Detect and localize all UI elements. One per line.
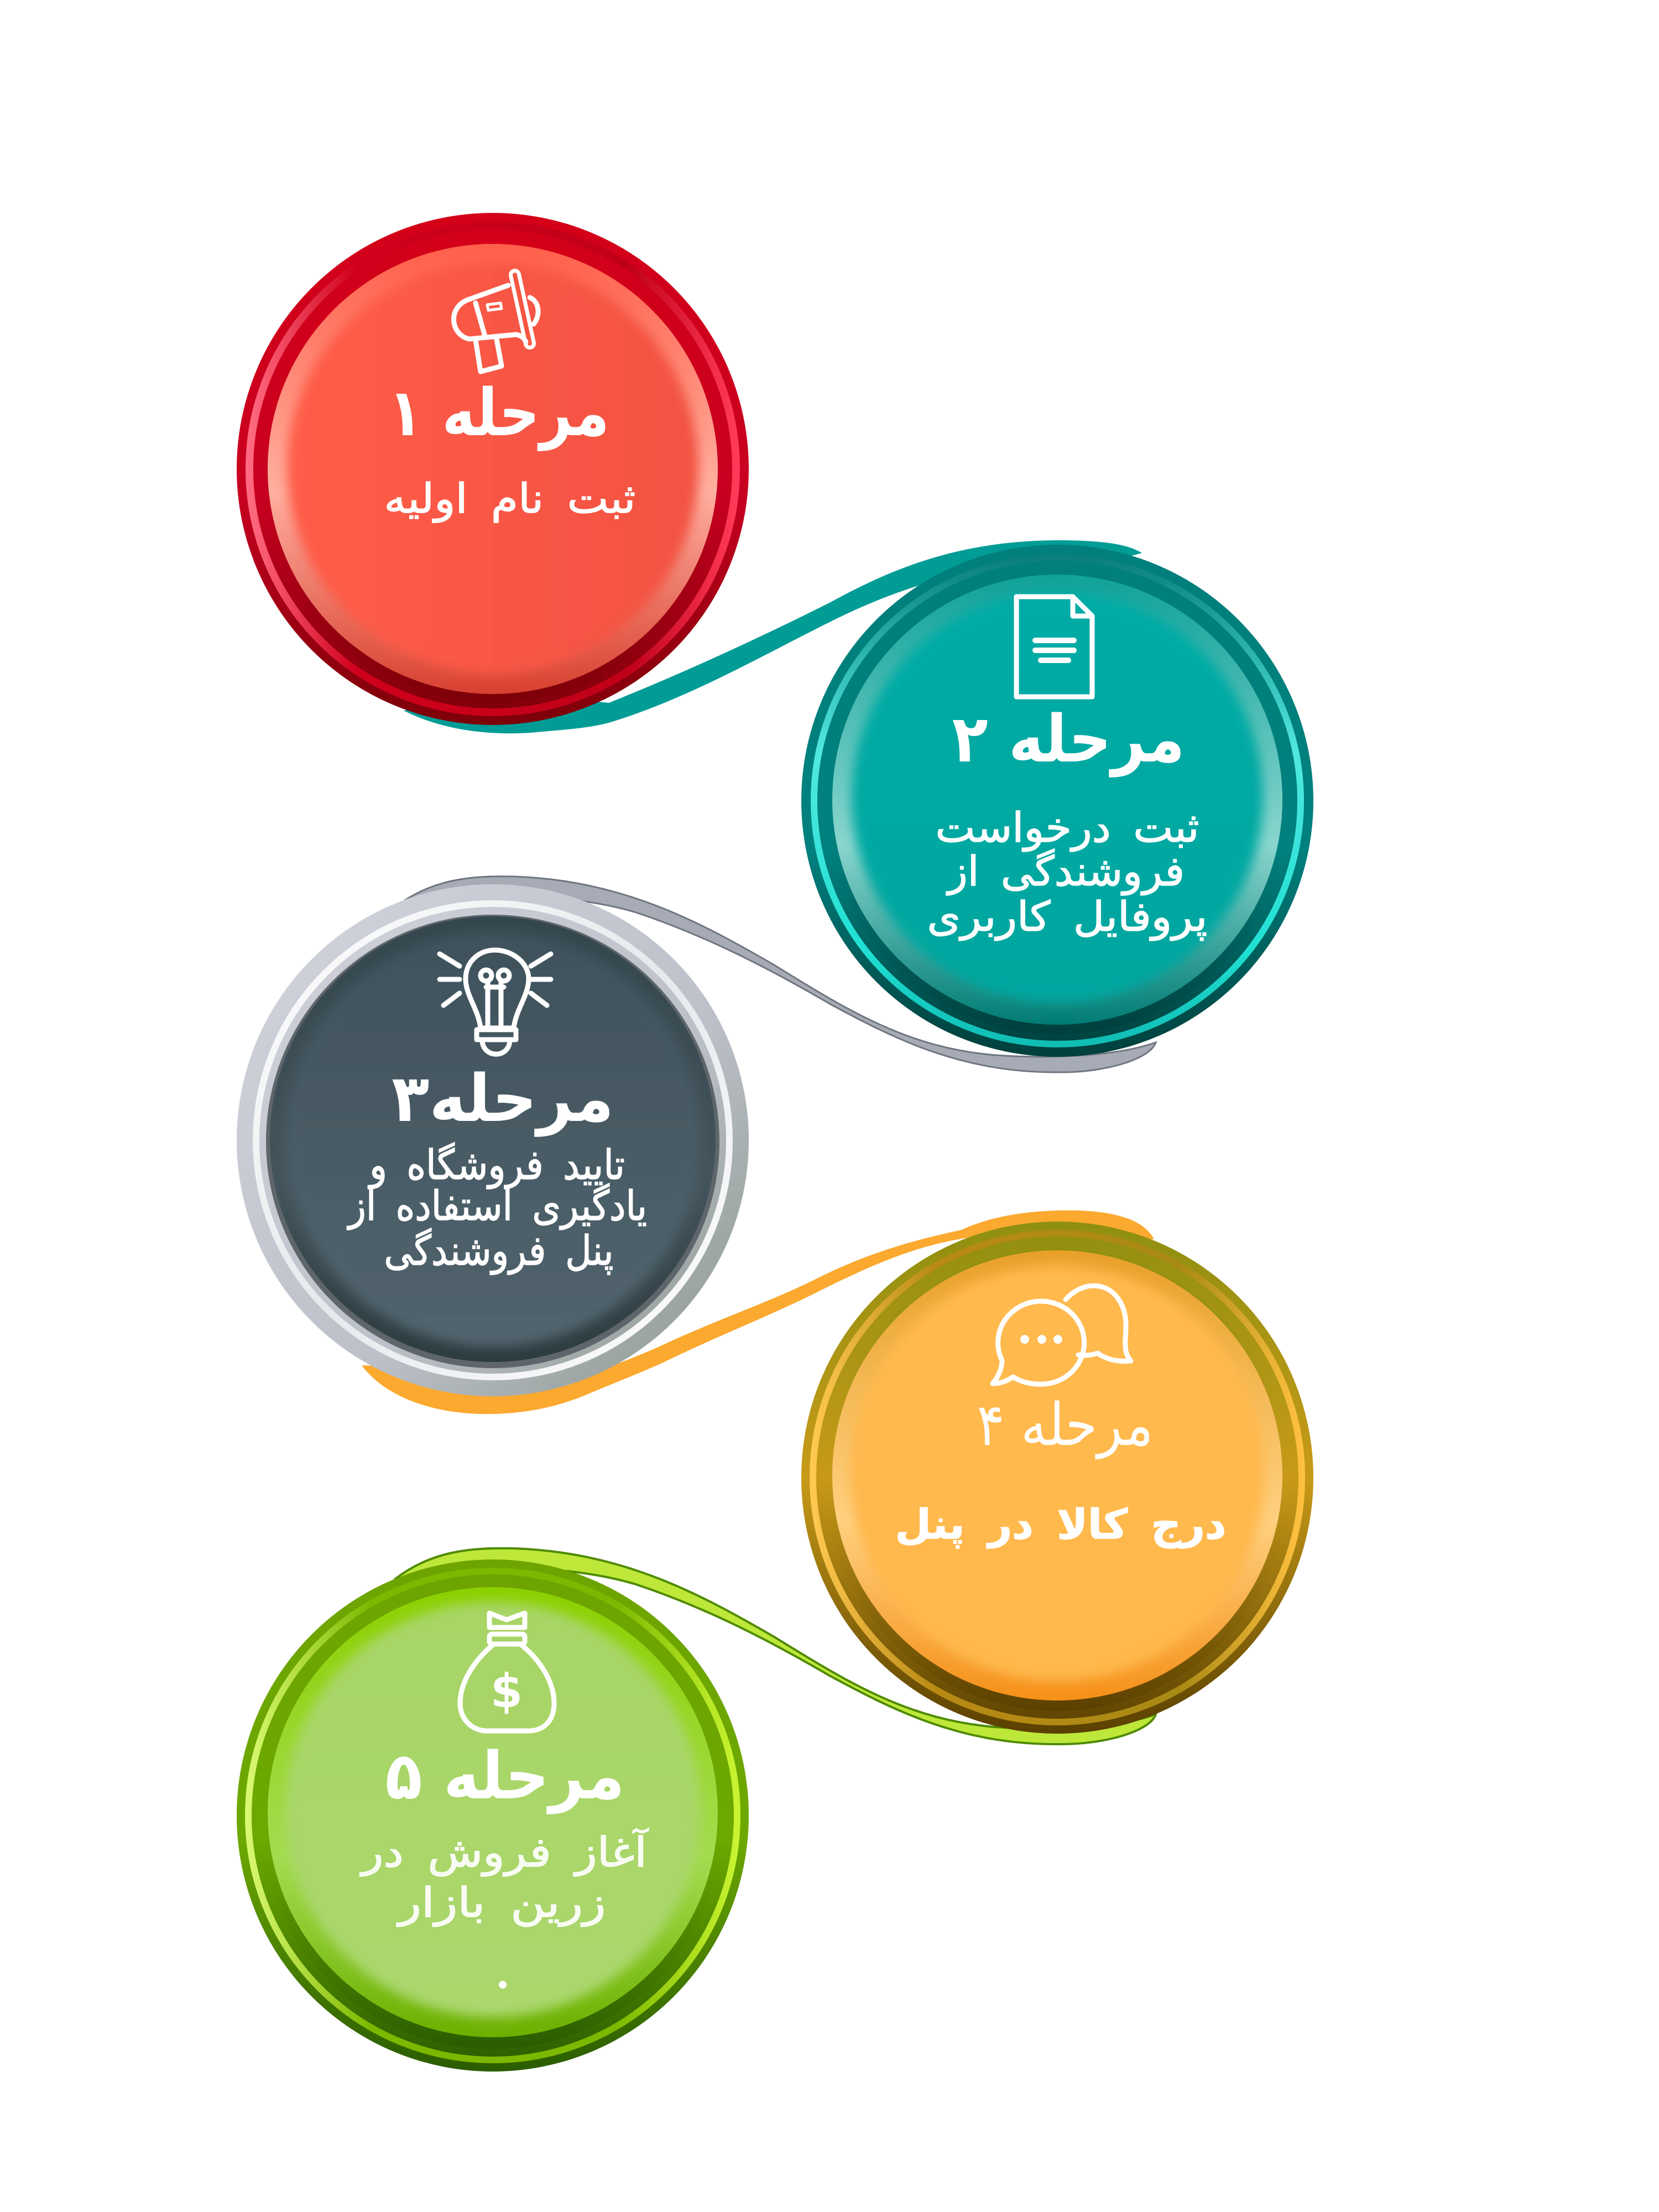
icon: document	[1016, 597, 1092, 697]
panel: step 3	[237, 884, 749, 1396]
icon: lightbulb	[440, 950, 551, 1054]
text: step 2: فروشندگی از	[946, 848, 1185, 895]
ribbon: step 1 to step 2	[404, 540, 1142, 733]
ribbon: step 4 to step 5	[395, 1548, 1156, 1744]
text: step 3: پنل فروشندگی	[384, 1227, 614, 1275]
icon: money bag	[460, 1613, 554, 1731]
text: step 2	[927, 804, 1208, 941]
text: step 4: درج کالا در پنل	[895, 1501, 1227, 1548]
heading: step 1: مرحله ۱	[388, 374, 609, 451]
panel: step 1	[237, 213, 749, 725]
icon dots	[1020, 1335, 1062, 1344]
text: step 3	[346, 1141, 647, 1275]
text: step 5	[359, 1828, 649, 1927]
heading: step 5: مرحله ۵	[385, 1738, 625, 1814]
text: step 3: تایید فروشگاه و	[367, 1141, 625, 1189]
text: step 2: پروفایل کاربری	[927, 893, 1208, 941]
icon: money bag: $	[491, 1664, 523, 1718]
disc rim 2	[801, 545, 1313, 1057]
disc rim 1	[237, 213, 749, 725]
disc rim 3	[237, 884, 749, 1396]
heading: step 2: مرحله ۲	[952, 701, 1185, 778]
disc rim 5	[237, 1559, 749, 2072]
heading: step 3: مرحله۳	[392, 1060, 614, 1137]
panel: step 5	[237, 1559, 749, 2072]
text: step 1: ثبت نام اولیه	[384, 475, 636, 523]
text dot	[499, 1981, 507, 1989]
icon: chat bubbles	[993, 1286, 1131, 1384]
icon: megaphone	[453, 275, 538, 372]
text: step 3: یادگیری استفاده از	[346, 1182, 647, 1230]
text: step 5: زرین بازار	[396, 1879, 606, 1927]
ribbon: step 2 to step 3	[395, 877, 1156, 1072]
panel: step 4	[801, 1222, 1313, 1734]
text: step 5: آغاز فروش در	[359, 1828, 649, 1876]
heading: step 4: مرحله ۴	[977, 1391, 1154, 1459]
ribbon: step 3 to step 4	[362, 1211, 1154, 1414]
disc rim 4	[801, 1222, 1313, 1734]
text: step 2: ثبت درخواست	[936, 804, 1199, 852]
panel: step 2	[801, 545, 1313, 1057]
